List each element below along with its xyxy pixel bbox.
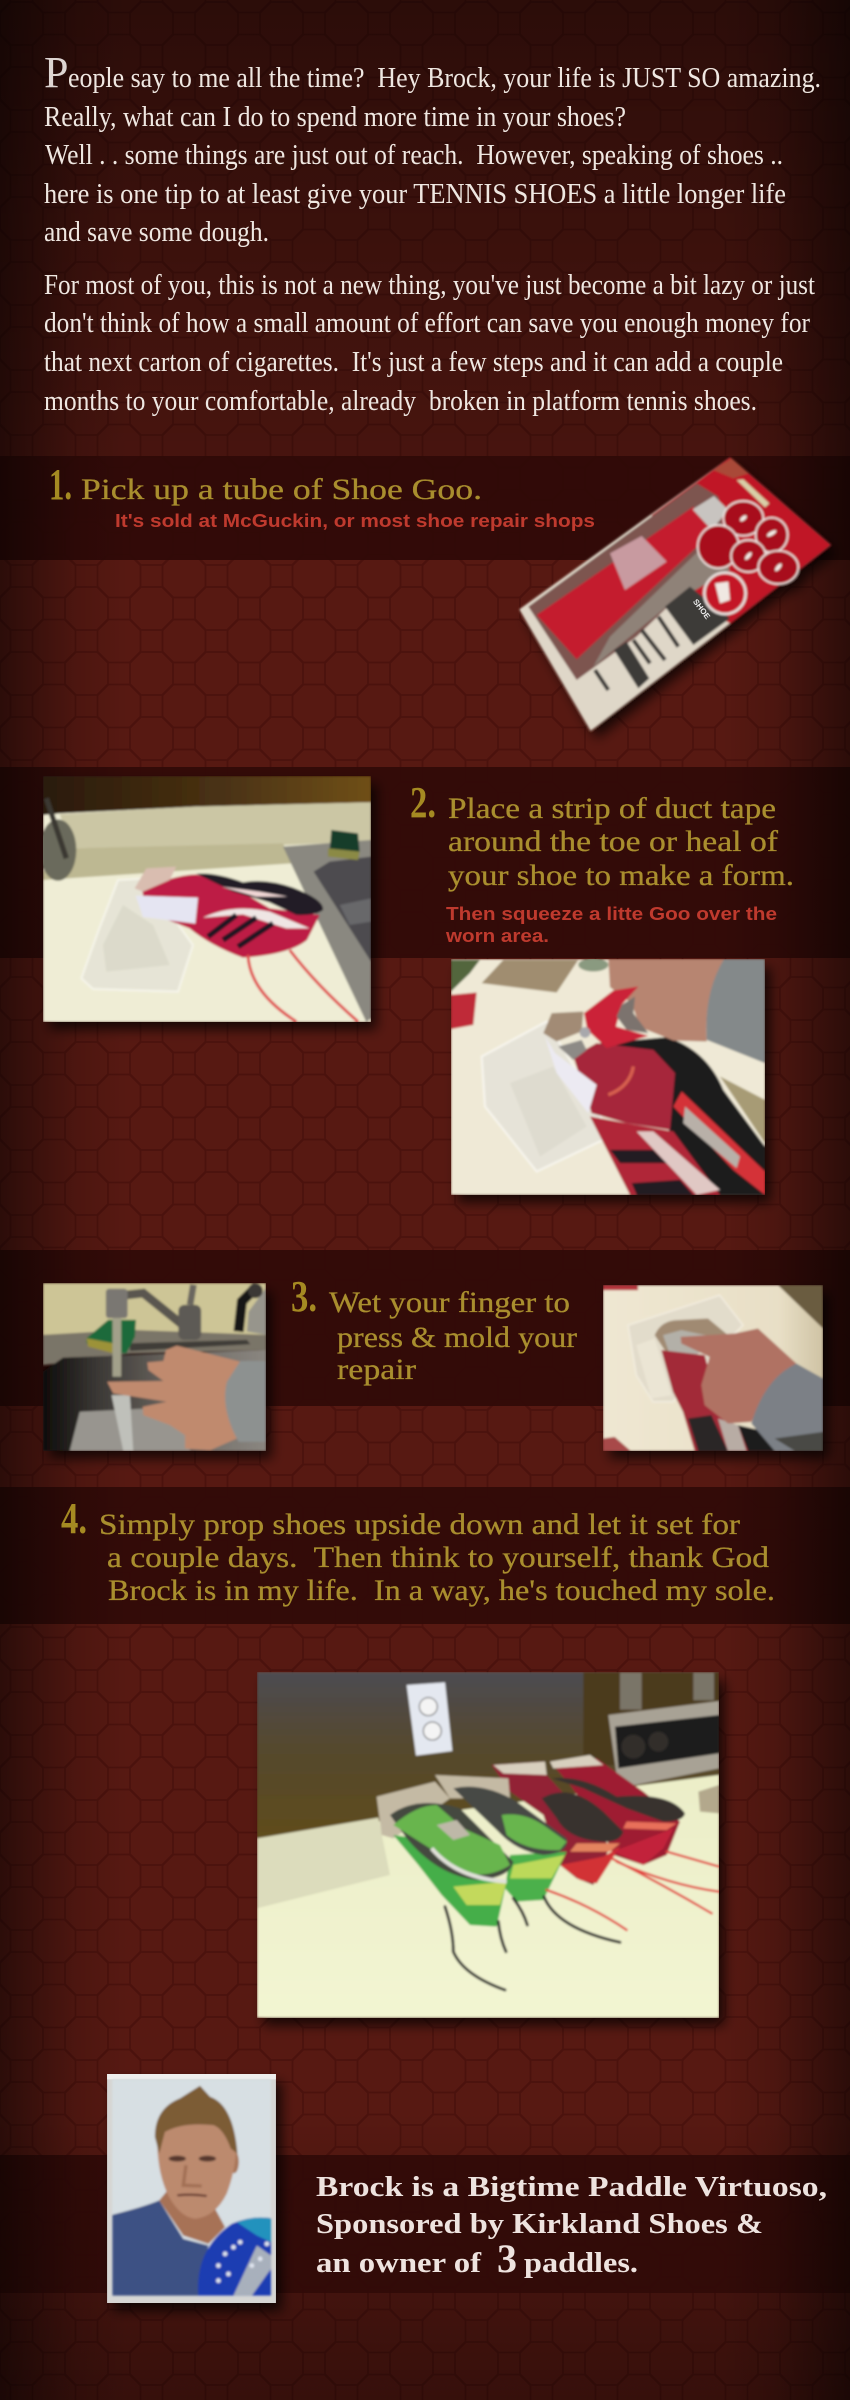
photo: wetting finger at sink: [43, 1283, 266, 1451]
card: [519, 457, 831, 731]
bio line 3: an owner of: [316, 2248, 482, 2279]
step 1 heading: [49, 460, 595, 531]
intro line 1 with drop-cap: P: [44, 48, 68, 97]
bio line 2: Sponsored by Kirkland Shoes &: [316, 2209, 763, 2240]
step 1 note: It's sold at McGuckin, or most shoe repair shops: [115, 511, 595, 531]
sink: [283, 840, 371, 1022]
band: step 1: [0, 456, 850, 560]
sponge: [330, 830, 360, 852]
step 4 line 2: a couple days. Then think to yourself, thank God: [107, 1541, 769, 1574]
step 3 line 1: Wet your finger to: [329, 1286, 570, 1319]
photo: squeezing goo on shoe: [451, 958, 765, 1195]
tray: [482, 1022, 603, 1172]
tube: [537, 507, 715, 659]
photo: shoe with tape on tray: [40, 776, 371, 1022]
bio line 3: 3: [497, 2236, 517, 2281]
outlet: [407, 1682, 452, 1756]
shirt: [112, 2200, 208, 2296]
laces: [445, 1852, 719, 1990]
band: step 3: [0, 1250, 850, 1406]
green shoes: [435, 1775, 510, 1798]
shoe: [142, 874, 320, 958]
intro line 2: Really, what can I do to spend more time in your shoes?: [44, 102, 626, 133]
step 4 heading: [61, 1494, 775, 1607]
step 2 note line 2: worn area.: [445, 926, 549, 946]
portrait of Brock: [107, 2074, 276, 2303]
step 2 line 3: your shoe to make a form.: [448, 859, 794, 892]
photo: molding the repair: [603, 1285, 823, 1451]
laces: [248, 950, 358, 1022]
step 3 line 3: repair: [337, 1353, 416, 1386]
author bio text: [316, 2172, 827, 2281]
intro line 8: that next carton of cigarettes. It's just a few steps and it can add a couple: [44, 347, 783, 378]
stove panel: [608, 1701, 719, 1787]
canisters: [620, 1672, 642, 1710]
intro line 9: months to your comfortable, already broken in platform tennis shoes.: [44, 386, 757, 417]
logo lettering blobs: [698, 501, 798, 584]
intro line 3: Well . . some things are just out of reach. However, speaking of shoes ..: [45, 140, 783, 171]
step 3 heading: [291, 1272, 577, 1386]
hand: [107, 1346, 240, 1450]
jar: [40, 819, 76, 881]
hair: [155, 2086, 237, 2154]
step 2 line 2: around the toe or heal of: [448, 825, 778, 858]
step number 4: 4.: [61, 1494, 87, 1543]
step 4 line 3: Brock is in my life. In a way, he's touched my sole.: [108, 1574, 775, 1607]
step 2 heading: [410, 778, 794, 946]
shoe: [661, 1350, 771, 1451]
step 4 line 1: Simply prop shoes upside down and let it set for: [99, 1508, 740, 1541]
ear: [229, 2151, 239, 2173]
sleeve: [751, 1364, 823, 1451]
tray: [81, 878, 193, 992]
eyes and mouth: [169, 2156, 186, 2162]
paddle: [198, 2217, 271, 2296]
band: author bio: [0, 2155, 850, 2293]
faucet: [113, 1293, 187, 1328]
blister: [528, 483, 727, 680]
band: step 4: [0, 1487, 850, 1624]
step 2 line 1: Place a strip of duct tape: [448, 792, 776, 825]
step 3 line 2: press & mold your: [337, 1321, 577, 1354]
bottle & sprayer: [247, 1288, 266, 1335]
seal: [704, 573, 746, 614]
intro text block: [44, 48, 821, 417]
face: [157, 2120, 236, 2219]
sponge: [86, 1320, 136, 1353]
shadow: [720, 1076, 765, 1143]
sleeve: [225, 1361, 266, 1442]
step number 1: 1.: [49, 460, 72, 509]
step number 3: 3.: [291, 1272, 317, 1321]
hand: [608, 959, 724, 1042]
hand: [681, 1328, 796, 1424]
step 2 note line 1: Then squeeze a litte Goo over the: [446, 904, 777, 924]
tray: [628, 1295, 743, 1402]
grey panels: [665, 587, 730, 645]
band: step 2: [0, 767, 850, 958]
bio line 3: paddles.: [524, 2248, 638, 2279]
sleeve: [706, 959, 765, 1063]
photo: shoes propped upside down: [257, 1672, 719, 2018]
paper tape top: [543, 1012, 583, 1042]
red shoes: [492, 1762, 610, 1885]
photo: Shoe Goo package: [519, 457, 831, 731]
package label text: SHOE: [691, 597, 712, 622]
water: [113, 1318, 121, 1377]
step number 2: 2.: [410, 778, 436, 827]
paper: [655, 1318, 728, 1355]
tube: [584, 986, 648, 1048]
step 1 title: Pick up a tube of Shoe Goo.: [81, 473, 482, 506]
intro line 5: and save some dough.: [44, 217, 269, 248]
intro line 4: here is one tip to at least give your TENNIS SHOES a little longer life: [44, 179, 786, 210]
shoe: [600, 1037, 765, 1195]
bio line 1: Brock is a Bigtime Paddle Virtuoso,: [316, 2172, 827, 2203]
neck: [159, 2185, 225, 2244]
